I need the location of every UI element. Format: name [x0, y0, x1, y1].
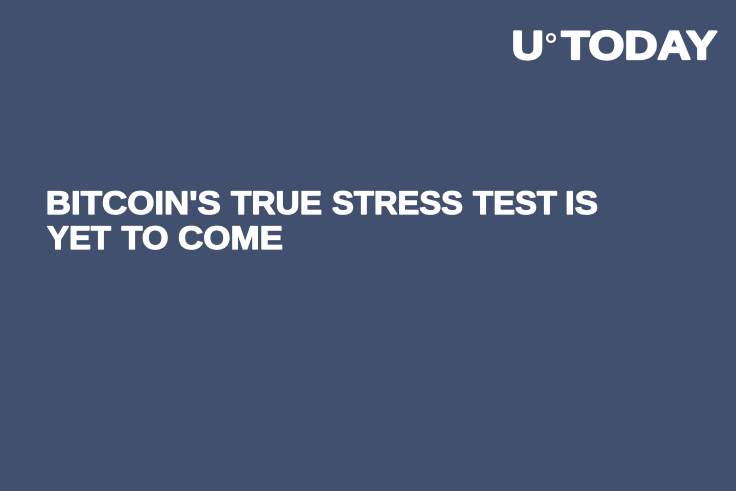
title line 2	[47, 220, 283, 256]
title	[46, 185, 598, 256]
logo degree mark	[547, 34, 555, 42]
title line 2: TO	[122, 220, 168, 256]
title line 1: TEST	[473, 185, 557, 221]
logo word TODAY: TODAY	[562, 24, 717, 68]
title line 1	[46, 185, 598, 221]
title line 1: BITCOIN'S	[46, 185, 221, 221]
title line 2: COME	[178, 220, 283, 256]
title line 2: YET	[47, 220, 111, 256]
logo letter U: U	[512, 24, 544, 68]
logo: U.Today	[512, 24, 717, 68]
title line 1: IS	[565, 185, 598, 221]
title line 1: TRUE	[231, 185, 322, 221]
title line 1: STRESS	[332, 185, 463, 221]
